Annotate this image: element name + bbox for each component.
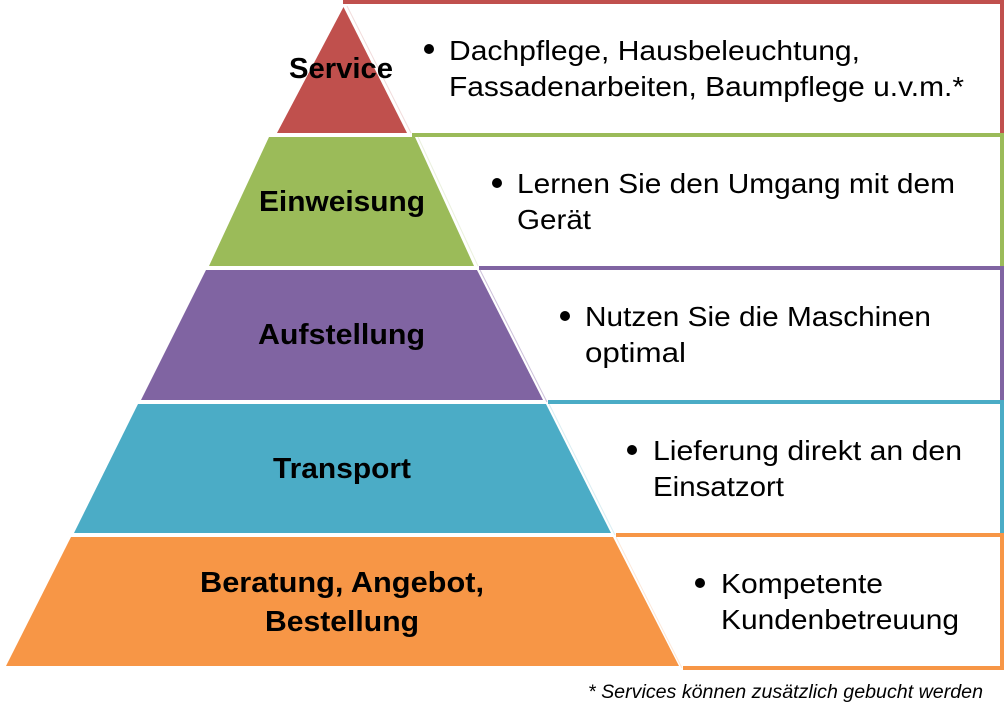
pyramid tier: einweisung — [209, 137, 474, 266]
panel: aufstellung — [141, 268, 1002, 402]
panel: einweisung — [209, 135, 1002, 266]
tier label: service: Service — [289, 53, 393, 85]
box outline: service — [343, 2, 1002, 133]
edge highlight: transport — [549, 404, 615, 535]
edge highlight: service — [347, 6, 411, 133]
footnote: * Services können zusätzlich gebucht werden — [588, 681, 983, 703]
edge highlight: aufstellung — [480, 270, 547, 402]
bullet list: aufstellung: optimal — [585, 337, 686, 368]
bullet list: transport — [627, 435, 962, 502]
bullet list: beratung: Kundenbetreuung — [721, 604, 959, 635]
bullet list: transport: Einsatzort — [653, 471, 784, 502]
bullet list: einweisung: Gerät — [517, 204, 591, 235]
tier label: beratung — [200, 567, 484, 638]
edge highlight: beratung — [616, 537, 682, 668]
edge highlight: einweisung — [418, 137, 478, 266]
box outline: einweisung — [412, 135, 1002, 266]
bullet list: aufstellung — [560, 301, 931, 368]
panel: service — [277, 2, 1002, 133]
pyramid tier: aufstellung — [141, 270, 543, 400]
bullet list: beratung: Kompetente — [721, 568, 883, 599]
bullet list: service — [424, 35, 964, 102]
tier label: beratung: Bestellung — [265, 606, 419, 638]
bullet list: transport: Lieferung direkt an den — [653, 435, 962, 466]
bullet list: einweisung — [492, 168, 955, 235]
tier label: transport: Transport — [273, 453, 411, 485]
bullet list: beratung — [695, 568, 959, 635]
box outline: aufstellung — [479, 268, 1002, 400]
tier label: einweisung: Einweisung — [259, 186, 425, 218]
bullet list: aufstellung: Nutzen Sie die Maschinen — [585, 301, 931, 332]
bullet list: service: Fassadenarbeiten, Baumpflege u.v.m.* — [449, 71, 964, 102]
tier label: beratung: Beratung, Angebot, — [200, 567, 484, 599]
tier label: aufstellung: Aufstellung — [258, 319, 425, 351]
panel: transport — [74, 402, 1002, 535]
pyramid tier: transport — [74, 404, 611, 533]
pyramid tier: beratung — [6, 537, 679, 666]
box outline: beratung — [616, 535, 1002, 668]
panel: beratung — [6, 535, 1002, 668]
bullet list: einweisung: Lernen Sie den Umgang mit dem — [517, 168, 955, 199]
box outline: transport — [548, 402, 1002, 533]
pyramid tier: service — [277, 7, 407, 133]
bullet list: service: Dachpflege, Hausbeleuchtung, — [449, 35, 860, 66]
